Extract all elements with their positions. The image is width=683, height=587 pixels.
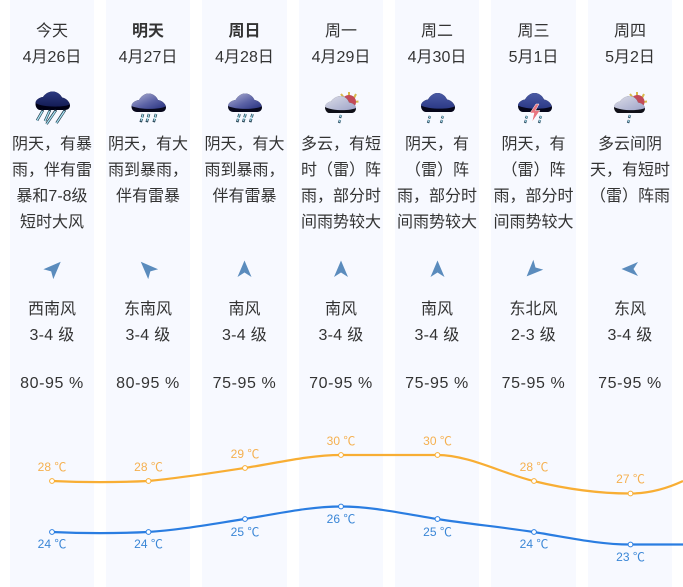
icon: heavy rainstorm — [36, 92, 70, 124]
date: wednesday: 5月1日 — [509, 49, 558, 66]
date: tuesday: 4月30日 — [408, 49, 466, 66]
wind direction and force — [28, 300, 76, 344]
date: monday: 4月29日 — [312, 49, 370, 66]
date: sunday — [215, 23, 274, 66]
panel: tuesday — [395, 0, 479, 587]
humidity: 75-95 % — [213, 375, 276, 392]
low temperature series: 25 ℃ — [423, 525, 452, 539]
icon: thundershower (wednesday) — [518, 93, 552, 123]
icon: cloudy to overcast with showers (thursday) — [614, 92, 647, 123]
low temperature series — [38, 504, 683, 564]
humidity: 75-95 % — [502, 375, 565, 392]
high temperature series: 27 ℃ — [616, 472, 645, 486]
weather description: 短时大风 — [20, 214, 84, 231]
weather description: 阴天，有大 — [108, 136, 188, 153]
weather description: 阴天，有大 — [204, 136, 284, 153]
date: tomorrow: 明天 — [132, 23, 164, 40]
weather description: 多云，有短 — [301, 136, 381, 153]
icon: overcast with showers (tuesday) — [421, 93, 455, 123]
wind direction and force: 西南风 — [28, 301, 76, 318]
weather description: 雨到暴雨， — [204, 162, 284, 179]
panel: sunday — [202, 0, 287, 587]
humidity: 75-95 % — [598, 375, 662, 392]
weather description — [493, 135, 574, 231]
high temperature series: 29 ℃ — [231, 447, 259, 461]
weather description: 暴和7-8级 — [16, 188, 88, 205]
humidity: 70-95 % — [309, 375, 373, 392]
weather description: （雷）阵雨 — [590, 188, 670, 205]
weather description — [301, 135, 381, 231]
wind direction and force — [414, 300, 460, 344]
panel: thursday — [588, 0, 672, 587]
wind direction and force: 南风 — [421, 301, 453, 318]
weather description: 阴天，有暴 — [12, 136, 92, 153]
wind direction and force: 3-4 级 — [29, 327, 75, 344]
weather description: 间雨势较大 — [301, 214, 381, 231]
low temperature series: 23 ℃ — [616, 550, 645, 564]
date: today — [23, 22, 81, 66]
arrow: south wind (monday) — [334, 260, 348, 277]
panel: wednesday — [491, 0, 576, 587]
low temperature series: 25 ℃ — [231, 525, 259, 539]
low temperature series: 24 ℃ — [520, 537, 548, 551]
weather description: 阴天，有 — [501, 136, 566, 153]
wind direction and force: 3-4 级 — [414, 327, 460, 344]
arrow: south wind (sunday) — [238, 260, 252, 277]
weather description: 雨，伴有雷 — [12, 162, 92, 179]
weather description: 时（雷）阵 — [301, 162, 381, 179]
icon: heavy rain to rainstorm (tomorrow) — [132, 94, 166, 123]
wind direction and force: 3-4 级 — [222, 327, 267, 344]
weather description — [204, 135, 284, 205]
wind direction and force: 南风 — [325, 301, 357, 318]
date: tuesday: 周二 — [421, 23, 453, 40]
date: wednesday: 周三 — [517, 23, 550, 40]
panel: today — [10, 0, 94, 587]
wind direction and force — [607, 300, 653, 344]
arrow: northeast wind — [522, 260, 543, 281]
weather description: （雷）阵 — [501, 162, 566, 179]
weather description: 阴天，有 — [405, 136, 469, 153]
wind direction and force: 东北风 — [509, 301, 558, 318]
date: today: 今天 — [36, 23, 68, 40]
weather description: 雨，部分时 — [493, 188, 574, 205]
wind direction and force — [509, 300, 558, 344]
wind direction and force: 2-3 级 — [511, 327, 556, 344]
weather description: 间雨势较大 — [493, 214, 574, 231]
weather description — [590, 135, 670, 205]
high temperature series: 28 ℃ — [520, 460, 548, 474]
high temperature series: 28 ℃ — [38, 460, 66, 474]
weather description — [397, 135, 477, 231]
wind direction and force: 3-4 级 — [318, 327, 364, 344]
date: monday: 周一 — [325, 23, 357, 40]
weather description: （雷）阵 — [405, 162, 469, 179]
date: tomorrow: 4月27日 — [119, 49, 177, 66]
weather description: 间雨势较大 — [397, 214, 477, 231]
arrow: southeast wind — [136, 257, 158, 279]
date: tuesday — [408, 23, 466, 66]
date: today: 4月26日 — [23, 49, 81, 66]
weather description: 伴有雷暴 — [212, 188, 276, 205]
humidity: 75-95 % — [405, 375, 469, 392]
weather description — [12, 135, 92, 231]
weather description: 伴有雷暴 — [116, 188, 180, 205]
panel: monday — [299, 0, 383, 587]
arrow: southwest wind — [43, 257, 66, 279]
date: thursday — [605, 23, 655, 66]
date: wednesday — [509, 23, 558, 66]
weather description: 雨到暴雨， — [108, 162, 188, 179]
high temperature series — [38, 434, 683, 496]
wind direction and force: 东风 — [614, 301, 646, 318]
wind direction and force — [222, 300, 267, 344]
low temperature series: 26 ℃ — [327, 512, 355, 526]
humidity: 80-95 % — [116, 375, 180, 392]
wind direction and force: 3-4 级 — [607, 327, 653, 344]
weather description: 多云间阴 — [598, 136, 662, 153]
date: sunday: 4月28日 — [215, 49, 274, 66]
wind direction and force: 东南风 — [124, 301, 172, 318]
weather description — [108, 135, 188, 205]
panel: tomorrow — [106, 0, 190, 587]
icon: heavy rain to rainstorm (sunday) — [228, 94, 262, 123]
weather description: 雨，部分时 — [397, 188, 477, 205]
wind direction and force: 3-4 级 — [125, 327, 171, 344]
date: tomorrow — [119, 23, 177, 66]
wind direction and force — [124, 300, 172, 344]
arrow: east wind — [622, 262, 638, 276]
high temperature series: 28 ℃ — [134, 460, 163, 474]
arrow: south wind (tuesday) — [430, 260, 444, 277]
date: sunday: 周日 — [228, 23, 260, 40]
date: thursday: 周四 — [614, 23, 646, 40]
icon: partly cloudy with showers (monday) — [325, 92, 358, 123]
low temperature series: 24 ℃ — [134, 537, 163, 551]
date: thursday: 5月2日 — [605, 49, 655, 66]
high temperature series: 30 ℃ — [327, 434, 355, 448]
weather description: 天，有短时 — [590, 162, 670, 179]
wind direction and force — [318, 300, 364, 344]
humidity: 80-95 % — [20, 375, 84, 392]
low temperature series: 24 ℃ — [38, 537, 66, 551]
date: monday — [312, 23, 370, 66]
high temperature series: 30 ℃ — [423, 434, 452, 448]
weather description: 雨，部分时 — [301, 188, 381, 205]
wind direction and force: 南风 — [228, 301, 260, 318]
